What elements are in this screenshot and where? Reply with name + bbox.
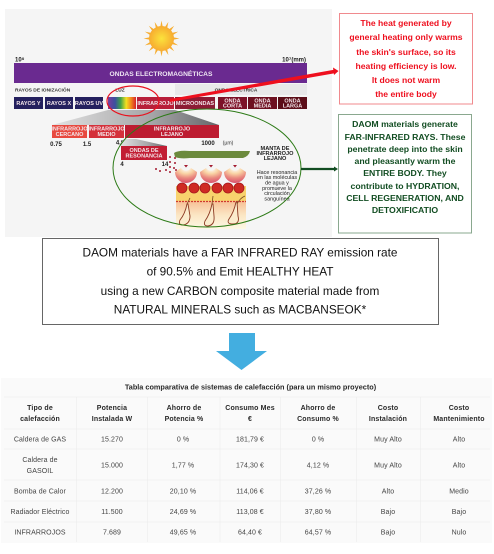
- panel: comparison table: [1, 378, 492, 543]
- row: Caldera de GASOIL: 174,30 €: [236, 462, 264, 470]
- row: Radiador Eléctrico: 11.500: [101, 509, 123, 516]
- row: Bomba de Calor: 20,10 %: [170, 488, 196, 496]
- text block: DAOM emission summary: of 90.5% and Emit HEALTHY HEAT: [147, 264, 333, 278]
- blanket description: [257, 146, 297, 202]
- scale labels: 10⁷(mm): [282, 58, 306, 64]
- spectrum row: RAYOS Y: [16, 101, 41, 107]
- table header row: Tipo de: [27, 405, 53, 412]
- row: INFRARROJOS: INFRARROJOS: [14, 530, 66, 536]
- row: Radiador Eléctrico: Radiador Eléctrico: [10, 509, 70, 516]
- callout: general heating: general heating only warms: [349, 32, 463, 42]
- purple banner: ONDAS ELECTROMAGNÉTICAS: [110, 69, 213, 78]
- row: Caldera de GASOIL: Muy Alto: [374, 462, 402, 470]
- spectrum row: ONDA: [224, 98, 241, 104]
- callout: general heating: heating efficiency is low.: [356, 61, 456, 71]
- panel: electromagnetic spectrum diagram: [5, 9, 332, 237]
- resonance waves box: [121, 146, 167, 160]
- row: Radiador Eléctrico: Bajo: [452, 509, 466, 516]
- row: Radiador Eléctrico: 113,08 €: [236, 509, 264, 516]
- spectrum row: MEDIA: [254, 103, 271, 109]
- blanket description: sanguínea: [264, 196, 290, 202]
- infrared bands: INFRARROJO: [154, 126, 191, 132]
- spectrum row: RAYOS UV: [75, 101, 103, 107]
- row: Radiador Eléctrico: 24,69 %: [170, 509, 196, 516]
- table header row: [20, 405, 485, 423]
- spectrum row: MICROONDAS: [176, 101, 214, 107]
- blanket description: LEJANO: [264, 156, 287, 162]
- row: Caldera de GASOIL: Caldera de: [22, 457, 58, 464]
- row: Caldera de GAS: [14, 436, 465, 444]
- callout: far infrared rays: and pleasantly warm the: [355, 156, 456, 166]
- arrow: blue down arrow: [216, 333, 267, 370]
- skin cross-section: [175, 165, 246, 229]
- wavelength labels: 0.75: [50, 142, 62, 148]
- row: INFRARROJOS: 7.689: [103, 530, 121, 536]
- row: Caldera de GASOIL: 15.000: [101, 462, 123, 470]
- row: INFRARROJOS: Nulo: [452, 530, 466, 536]
- row: INFRARROJOS: 49,65 %: [170, 530, 196, 536]
- row: Bomba de Calor: Alto: [382, 488, 394, 496]
- blanket description: en las moléculas: [257, 175, 297, 181]
- row: INFRARROJOS: Bajo: [381, 530, 395, 536]
- blanket description: INFRARROJO: [257, 151, 294, 157]
- blanket description: circulación: [264, 191, 290, 197]
- row: Radiador Eléctrico: Bajo: [381, 509, 395, 516]
- table header row: Instalada W: [92, 416, 133, 423]
- row: INFRARROJOS: [14, 530, 466, 536]
- callout: general heating: [340, 14, 472, 104]
- table header row: €: [248, 416, 252, 423]
- callout: general heating: the skin's surface, so its: [356, 47, 456, 57]
- table title: Tabla comparativa de sistemas de calefacción (para un mismo proyecto): [125, 382, 377, 392]
- callout: far infrared rays: contribute to HYDRATION,: [351, 181, 459, 191]
- row: Caldera de GAS: Muy Alto: [374, 436, 402, 444]
- text block: DAOM emission summary: NATURAL MINERALS such as MACBANSEOK*: [114, 302, 367, 316]
- callout: far infrared rays: ENTIRE BODY. They: [363, 168, 447, 178]
- row: Caldera de GAS: Caldera de GAS: [14, 436, 66, 444]
- resonance range labels: 14: [162, 162, 169, 168]
- text block: DAOM emission summary: DAOM materials have a FAR INFRARED RAY emission rate: [83, 246, 398, 260]
- spectrum row: [14, 97, 307, 109]
- arrow: green to far infrared callout: [301, 166, 338, 172]
- infrared bands: LEJANO: [161, 132, 184, 138]
- resonance waves box: RESONANCIA: [126, 154, 163, 160]
- row: Bomba de Calor: 12.200: [101, 488, 123, 496]
- spectrum row: LARGA: [283, 103, 302, 109]
- row: Caldera de GASOIL: 4,12 %: [307, 462, 329, 470]
- resonance fan: [121, 139, 167, 146]
- table header row: Ahorro de: [167, 405, 201, 412]
- blanket description: MANTA DE: [261, 146, 290, 152]
- scale labels: [15, 58, 306, 64]
- row: Caldera de GAS: 181,79 €: [236, 436, 264, 444]
- infrared bands: [51, 125, 219, 138]
- infrared bands: INFRARROJO: [51, 126, 88, 132]
- table header row: Costo: [449, 405, 469, 412]
- row: Bomba de Calor: [14, 488, 469, 496]
- table header row: Potencia: [97, 405, 127, 412]
- row: INFRARROJOS: 64,40 €: [238, 530, 262, 536]
- blanket description: Hace resonancia: [257, 170, 297, 176]
- table header row: calefacción: [20, 416, 60, 423]
- table header row: Instalación: [369, 416, 407, 423]
- scale labels: 10⁹: [15, 58, 25, 64]
- table header row: Potencia %: [165, 416, 204, 423]
- callout: general heating: The heat generated by: [360, 18, 452, 28]
- category labels: ONDA ELÉCTRICA: [215, 86, 258, 94]
- arrow: red to heat callout: [170, 68, 338, 102]
- table header row: Mantenimiento: [433, 416, 485, 423]
- text block: DAOM emission summary: [42, 238, 438, 324]
- row: Bomba de Calor: 114,06 €: [236, 488, 264, 496]
- callout: far infrared rays: [338, 114, 472, 233]
- wavelength labels: 1000: [201, 141, 215, 147]
- resonance range labels: [120, 162, 169, 168]
- resonance waves box: ONDAS DE: [129, 148, 159, 154]
- red ellipse highlight: [107, 86, 159, 116]
- callout: general heating: the entire body: [375, 89, 437, 99]
- wavelength labels: 1.5: [83, 142, 92, 148]
- callout: far infrared rays: DETOXIFICATIO: [372, 205, 438, 215]
- row: Radiador Eléctrico: 37,80 %: [305, 509, 331, 516]
- far infrared blanket: [174, 151, 250, 158]
- text block: DAOM emission summary: using a new CARBON composite material made from: [101, 284, 379, 298]
- row: Caldera de GASOIL: [22, 457, 465, 475]
- callout: general heating: It does not warm: [372, 75, 440, 85]
- blanket description: promueve la: [262, 186, 292, 192]
- callout: far infrared rays: penetrate deep into the skin: [347, 144, 463, 154]
- callout: far infrared rays: FAR-INFRARED RAYS. These: [345, 132, 466, 142]
- row: Caldera de GAS: 0 %: [312, 436, 324, 444]
- row: Caldera de GAS: 0 %: [177, 436, 189, 444]
- wavelength labels: (µm): [223, 140, 234, 146]
- spectrum row: CORTA: [223, 103, 242, 109]
- spectrum row: ONDA: [284, 98, 301, 104]
- infrared bands: INFRARROJO: [88, 126, 125, 132]
- row: Radiador Eléctrico: [10, 509, 466, 516]
- infrared expansion fan: [52, 110, 219, 125]
- wavelength labels: [50, 140, 234, 148]
- table header row: Costo: [378, 405, 398, 412]
- infrared bands: CERCANO: [56, 132, 84, 138]
- callout: far infrared rays: DAOM materials generate: [352, 119, 458, 129]
- table header row: Consumo %: [297, 416, 340, 423]
- callout: far infrared rays: CELL REGENERATION, AND: [346, 193, 464, 203]
- category labels: LUZ: [115, 88, 125, 94]
- table header row: Ahorro de: [301, 405, 335, 412]
- table header row: Consumo Mes: [225, 405, 275, 412]
- row: Caldera de GAS: Alto: [453, 436, 465, 444]
- category labels: RAYOS DE IONIZACIÓN: [15, 86, 71, 94]
- blanket description: de agua y: [265, 180, 289, 186]
- spectrum row: INFRARROJO: [137, 101, 174, 107]
- green ellipse highlight: [113, 109, 301, 227]
- icon: sun: [144, 20, 180, 56]
- row: Caldera de GASOIL: GASOIL: [27, 468, 53, 475]
- row: Caldera de GAS: 15.270: [101, 436, 123, 444]
- infrared bands: MEDIO: [97, 132, 116, 138]
- row: Bomba de Calor: Bomba de Calor: [14, 488, 67, 496]
- heat particles: [155, 156, 177, 173]
- row: Bomba de Calor: 37,26 %: [305, 488, 331, 496]
- purple banner: [14, 63, 307, 83]
- spectrum row: RAYOS X: [47, 101, 71, 107]
- row: Bomba de Calor: Medio: [449, 488, 469, 496]
- row: INFRARROJOS: 64,57 %: [305, 530, 331, 536]
- category labels: [15, 84, 307, 95]
- resonance range labels: 4: [120, 162, 124, 168]
- row: Caldera de GASOIL: 1,77 %: [172, 462, 194, 470]
- row: Caldera de GASOIL: Alto: [453, 462, 465, 470]
- wavelength labels: 4.8: [116, 140, 125, 146]
- spectrum row: ONDA: [254, 98, 271, 104]
